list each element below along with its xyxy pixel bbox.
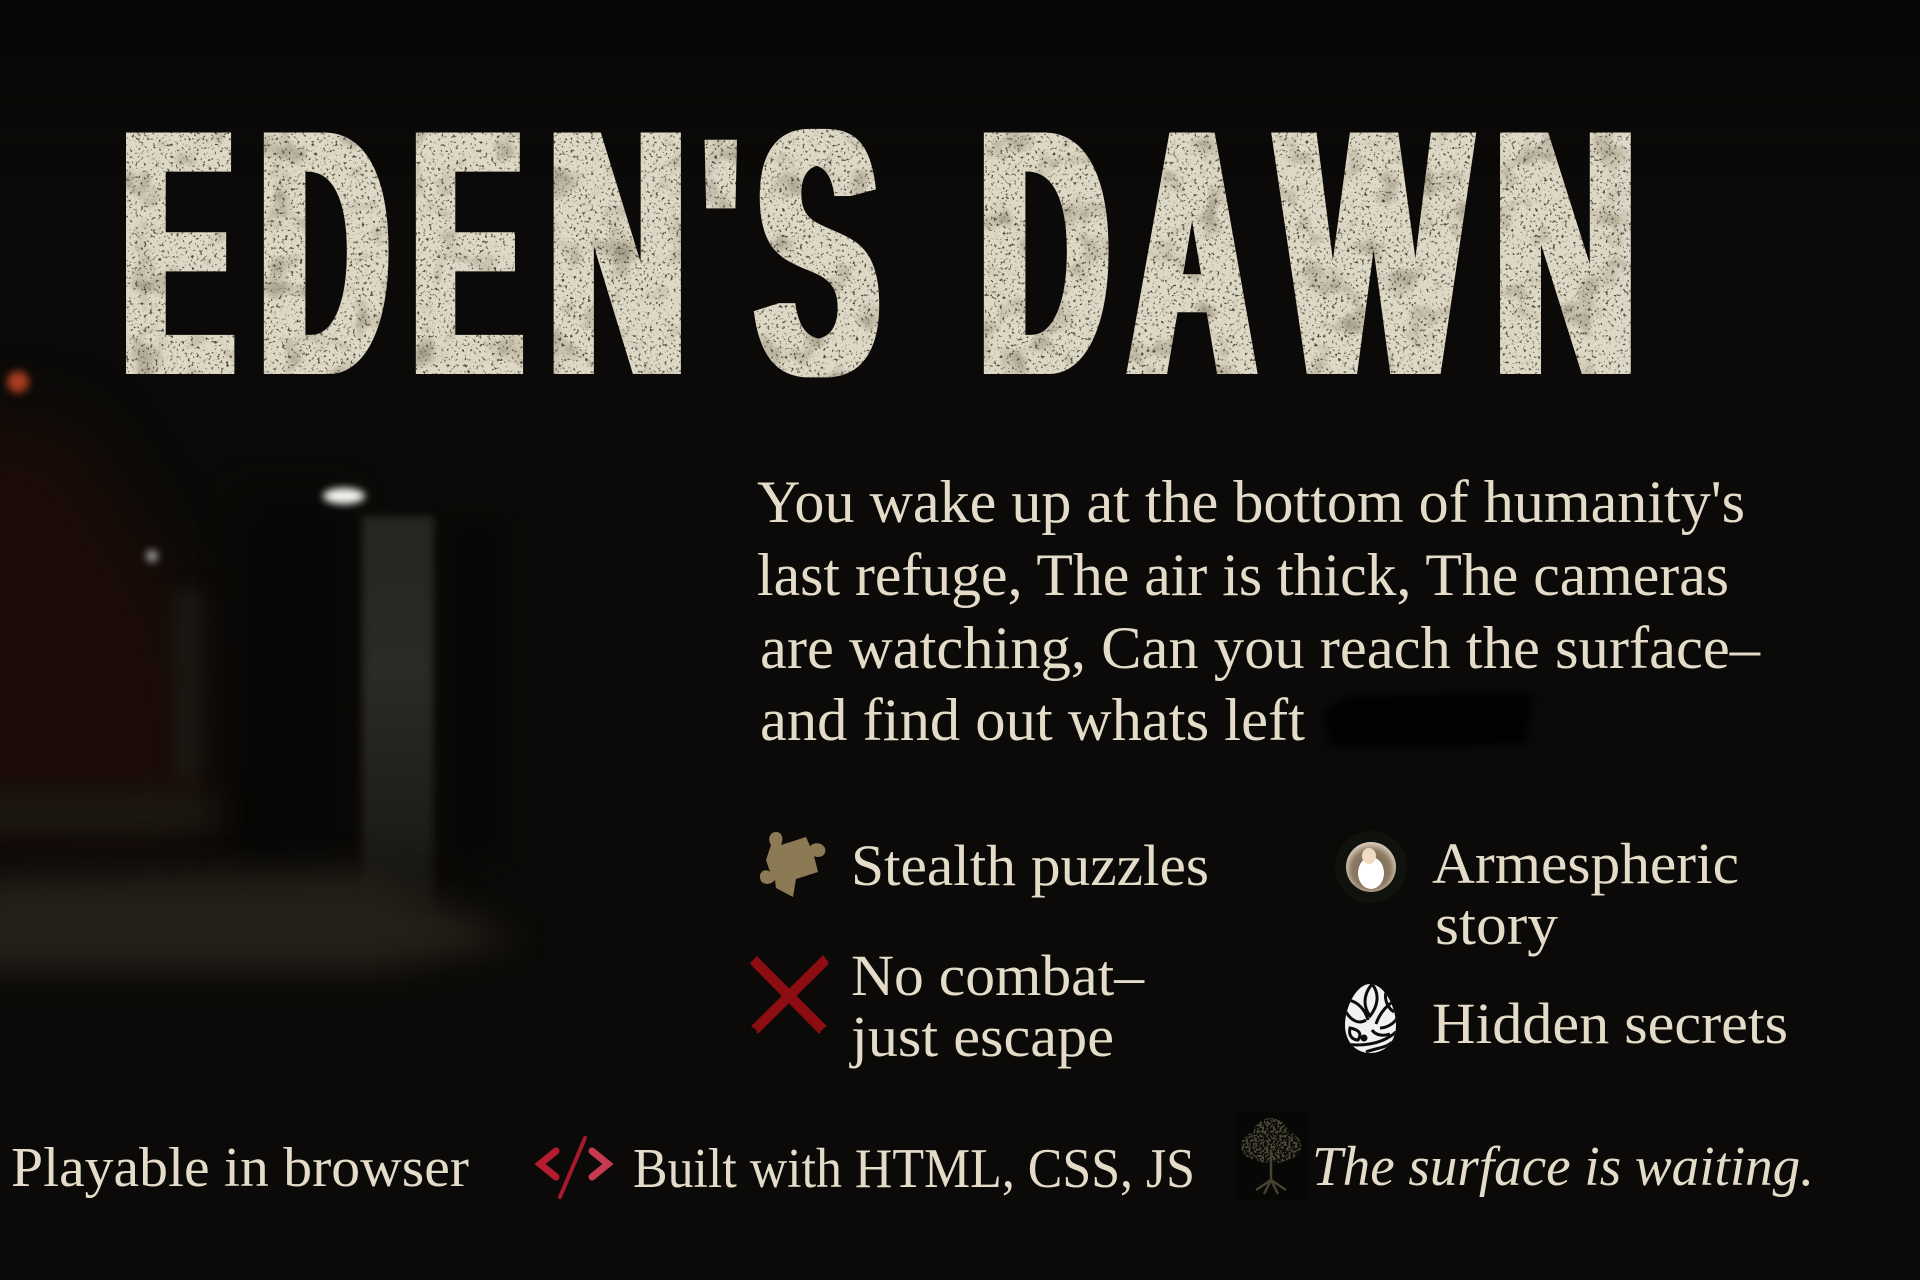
intro paragraph: are watching, Can you reach the surface–: [760, 615, 1761, 681]
title: EDEN'S DAWN: W: [1279, 56, 1470, 449]
footer: tagline: The surface is waiting.: [1312, 1136, 1814, 1198]
title: EDEN'S DAWN: E: [123, 58, 233, 450]
title: EDEN'S DAWN: N: [1495, 58, 1636, 449]
feature: no combat: [751, 943, 1145, 1069]
icon: puzzle piece: [760, 832, 825, 897]
title: EDEN'S DAWN: [123, 56, 1636, 450]
obscured smudge after paragraph: [1322, 694, 1535, 747]
icon: red scratched X: [751, 956, 828, 1033]
icon: code brackets: [540, 1138, 608, 1197]
footer: playable in browser: Playable in browser: [11, 1137, 469, 1199]
feature: stealth puzzles: Stealth puzzles: [851, 833, 1209, 898]
feature: hidden secrets: [1345, 984, 1786, 1053]
title: EDEN'S DAWN: A: [1130, 57, 1254, 449]
feature: no combat: No combat–: [851, 943, 1145, 1008]
icon: patterned egg: [1345, 984, 1396, 1053]
title: EDEN'S DAWN: ': [706, 81, 735, 388]
title: EDEN'S DAWN: N: [549, 57, 686, 449]
icon: glowing bulb: [1335, 831, 1407, 903]
intro paragraph: and find out whats left: [760, 687, 1305, 753]
feature: atmospheric story: story: [1435, 892, 1558, 957]
title: EDEN'S DAWN: D: [260, 56, 388, 448]
icon: tree with roots: [1236, 1112, 1308, 1200]
intro paragraph: [757, 469, 1761, 753]
footer: tagline: [1236, 1112, 1814, 1200]
feature: no combat: just escape: [849, 1004, 1114, 1069]
intro paragraph: last refuge, The air is thick, The cameras: [757, 542, 1729, 608]
feature: hidden secrets: Hidden secrets: [1432, 991, 1788, 1056]
feature: atmospheric story: Armespheric: [1432, 831, 1739, 896]
title: EDEN'S DAWN: E: [413, 56, 521, 448]
intro paragraph: You wake up at the bottom of humanity's: [757, 469, 1745, 535]
title: EDEN'S DAWN: S: [757, 58, 878, 449]
footer: built with: Built with HTML, CSS, JS: [633, 1138, 1195, 1200]
title: EDEN'S DAWN: D: [980, 56, 1108, 448]
feature: atmospheric story: [1335, 831, 1739, 957]
